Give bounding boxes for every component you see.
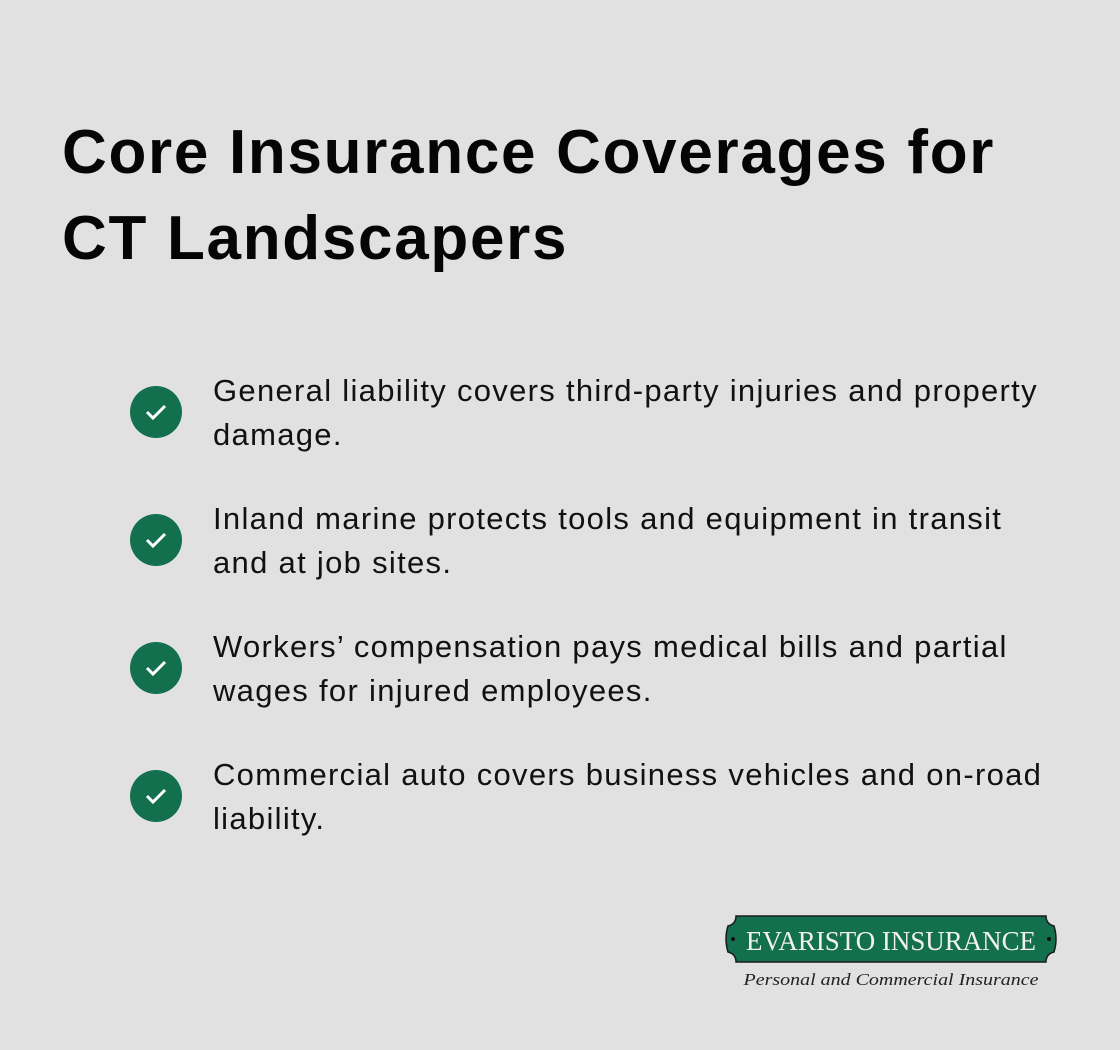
- text: General liability covers third-party injuries and property: [213, 373, 1038, 408]
- text: [213, 757, 1042, 836]
- text: Inland marine protects tools and equipment in transit: [213, 501, 1002, 536]
- icon: check: [130, 514, 182, 566]
- icon: check: [130, 386, 182, 438]
- tagline: Personal and Commercial Insurance: [742, 970, 1039, 989]
- logo plaque: EVARISTO INSURANCE: [746, 926, 1036, 956]
- item: general liability: [130, 373, 1038, 452]
- text: [213, 501, 1002, 580]
- text: damage.: [213, 417, 343, 452]
- text: [213, 373, 1038, 452]
- text: wages for injured employees.: [213, 673, 653, 708]
- text: Workers’ compensation pays medical bills and partial: [213, 629, 1008, 664]
- item: commercial auto: [130, 757, 1042, 836]
- logo plaque: [726, 916, 1056, 962]
- text: Commercial auto covers business vehicles and on-road: [213, 757, 1042, 792]
- title: CT Landscapers: [62, 204, 568, 273]
- logo: [725, 915, 1057, 989]
- icon: check: [130, 770, 182, 822]
- text: liability.: [213, 801, 325, 836]
- icon: check: [130, 642, 182, 694]
- item: inland marine: [130, 501, 1002, 580]
- item: workers comp: [130, 629, 1008, 708]
- title: Core Insurance Coverages for: [62, 118, 995, 187]
- text: [213, 629, 1008, 708]
- text: and at job sites.: [213, 545, 452, 580]
- title: [62, 118, 995, 273]
